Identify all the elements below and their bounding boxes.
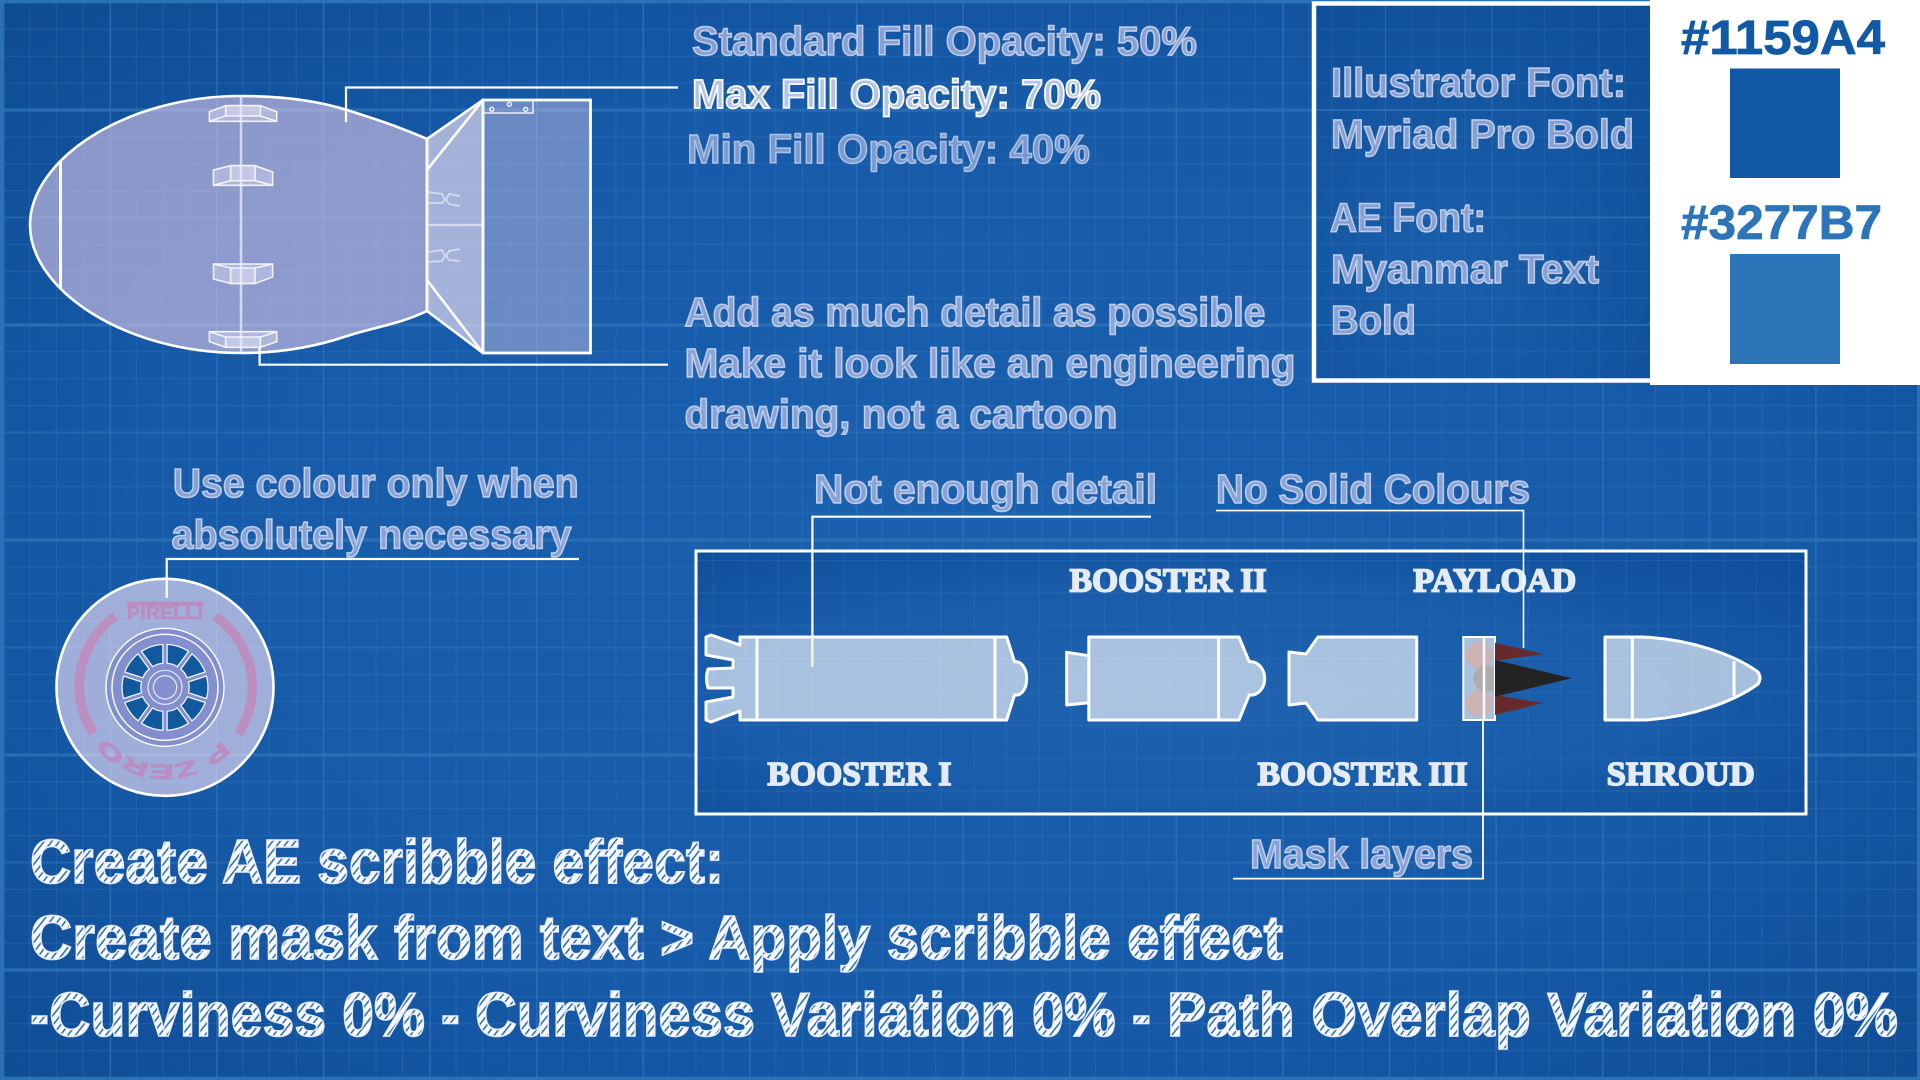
bomb body — [30, 96, 427, 353]
callout: mask layers: Mask layers — [1250, 831, 1473, 877]
fin 1 — [209, 106, 277, 121]
wheel hub — [106, 628, 224, 746]
text block: fill opacity notes: Min Fill Opacity: 40% — [687, 126, 1090, 172]
panel: fonts — [1314, 4, 1654, 380]
callout: no solid colours — [1216, 466, 1530, 648]
PIRELLI logo: PIRELLI — [127, 603, 203, 623]
leader line: fill opacity — [346, 88, 678, 122]
font notes text: AE Font: — [1330, 195, 1486, 241]
text block: detail notes: Make it look like an engineering — [684, 340, 1296, 386]
fin 2 — [214, 166, 273, 185]
nose cap line — [59, 162, 62, 288]
booster I — [706, 635, 1027, 722]
panel: colour swatches — [1650, 0, 1920, 385]
wheel rim ring — [112, 634, 218, 740]
colour code 1: #1159A4 — [1681, 12, 1885, 65]
stage labels: BOOSTER III — [1258, 756, 1468, 793]
font notes text — [1330, 60, 1634, 343]
text block: scribble effect instructions: Create AE scribble effect: — [30, 828, 724, 897]
tail cone — [427, 100, 483, 353]
illustration: bomb engineering drawing — [30, 96, 590, 353]
text block: detail notes: drawing, not a cartoon — [684, 391, 1118, 437]
booster II — [1067, 637, 1265, 720]
font notes text: Myriad Pro Bold — [1331, 111, 1634, 157]
tail box plate with rivets — [483, 100, 533, 113]
swatch 2 — [1730, 254, 1840, 364]
payload — [1463, 637, 1572, 720]
text block: scribble effect instructions: Curviness Variation 0% - — [475, 981, 1151, 1050]
text block: fill opacity notes: Standard Fill Opacity: 50% — [692, 18, 1197, 64]
fork details — [428, 192, 460, 262]
fin 4 — [209, 332, 277, 347]
hub centre — [148, 670, 182, 704]
tail box — [483, 100, 590, 353]
spoke windows — [122, 643, 208, 732]
pink sidewall arcs — [79, 616, 252, 734]
stage labels: BOOSTER I — [768, 756, 952, 793]
text block: scribble effect instructions: Path Overlap Variation 0% — [1167, 981, 1898, 1050]
illustration: racing tyre — [55, 578, 275, 798]
text block: detail notes: Add as much detail as possible — [684, 289, 1266, 335]
text block: fill opacity notes: Max Fill Opacity: 70% — [692, 71, 1101, 117]
tail cone braces — [427, 100, 483, 353]
text block: colour note: Use colour only when — [173, 460, 579, 506]
stage labels: PAYLOAD — [1413, 563, 1576, 600]
callout: no solid colours: No Solid Colours — [1216, 466, 1530, 512]
colour code 2: #3277B7 — [1681, 197, 1882, 250]
shroud — [1605, 637, 1760, 720]
centre rib — [240, 96, 242, 353]
text block: scribble effect instructions — [30, 828, 1898, 1050]
tail cone centre line — [428, 224, 483, 226]
text block: detail notes — [684, 289, 1296, 437]
leader line: detail note — [260, 347, 668, 365]
callout: mask layers — [1233, 720, 1483, 879]
stage labels — [768, 563, 1755, 793]
text block: colour note: absolutely necessary — [172, 512, 572, 558]
stage labels: SHROUD — [1607, 756, 1755, 793]
booster III — [1289, 637, 1417, 720]
swatch 1 — [1730, 68, 1840, 178]
text block: scribble effect instructions: Create mask from text > Apply scribble effect — [30, 904, 1283, 973]
leader line: tyre colour note — [167, 559, 579, 598]
font notes text: Illustrator Font: — [1331, 60, 1626, 106]
panel: rocket stages — [696, 551, 1806, 814]
fin 3 — [214, 264, 273, 284]
callout: not enough detail: Not enough detail — [814, 466, 1157, 512]
stage labels: BOOSTER II — [1070, 563, 1267, 600]
font notes text: Bold — [1331, 297, 1416, 343]
tyre outer — [56, 579, 274, 796]
text block: fill opacity notes — [687, 18, 1197, 172]
font notes text: Myanmar Text — [1331, 246, 1599, 292]
text block: colour note — [172, 460, 579, 558]
callout: not enough detail — [812, 466, 1157, 667]
P ZERO arc text: P ZERO — [98, 742, 230, 780]
text block: scribble effect instructions: -Curviness 0% - — [30, 981, 460, 1050]
